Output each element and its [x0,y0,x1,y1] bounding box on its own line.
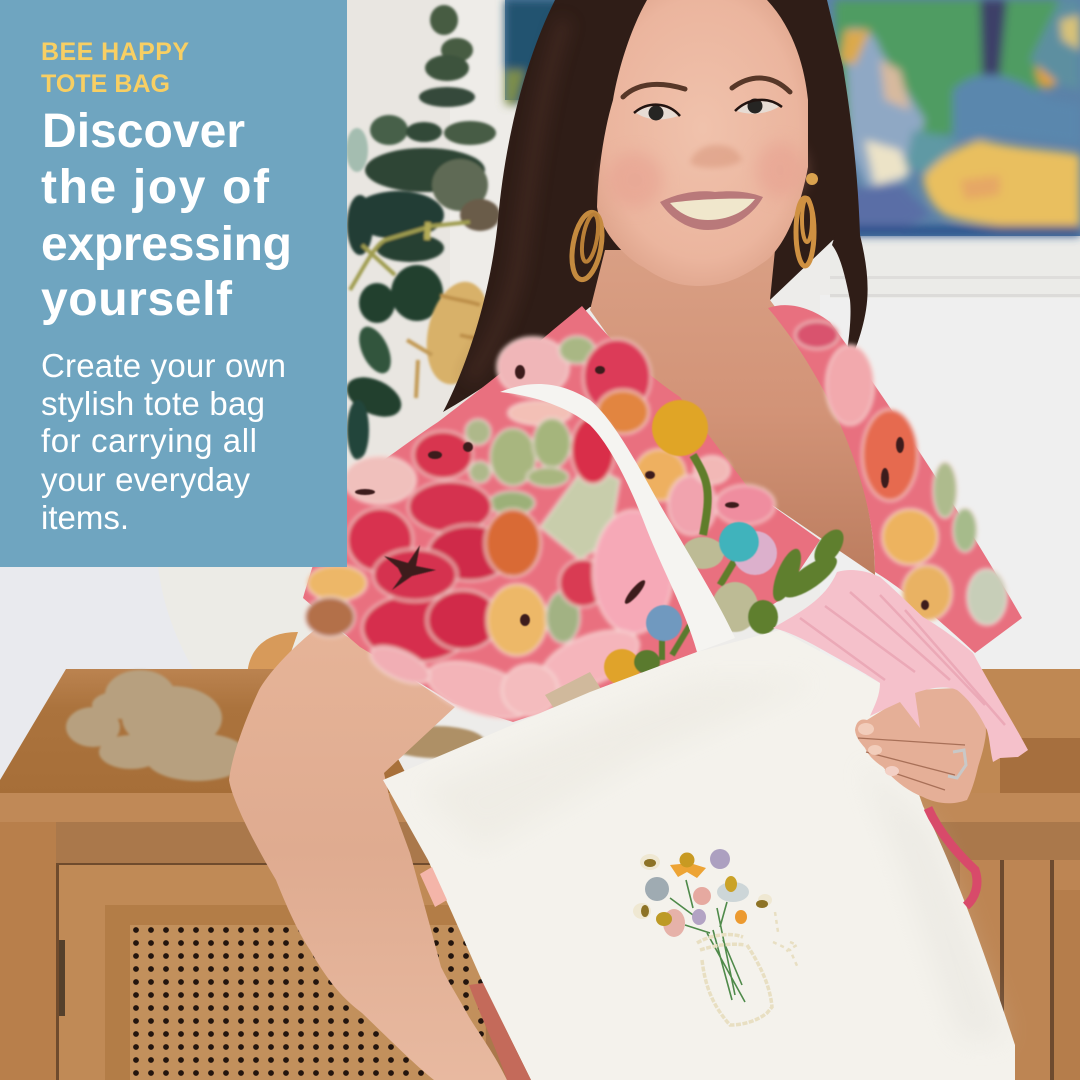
kicker text: BEE HAPPY [41,38,189,66]
woman: back hair [443,0,860,412]
pink daisy [656,909,685,937]
jute place mat [66,670,485,781]
tote bag strap [500,384,735,652]
tote bag label [420,867,447,907]
main heading: the joy of [41,161,270,214]
panel background [0,0,347,567]
felt flowers [604,400,849,685]
main heading: yourself [41,273,233,326]
body text: for carrying all [41,422,257,459]
body text: Create your own [41,347,286,384]
tissue wrapping [545,672,605,710]
pale daisy [717,876,749,902]
jar lid bow [697,935,745,950]
body text: your everyday [41,461,250,498]
pink scarf [773,570,1028,762]
lilac flower [692,909,706,925]
main heading: Discover [42,105,245,158]
main heading [41,105,292,326]
bee trail [773,912,798,968]
framed painting [450,0,1080,298]
plant with leaves [341,5,500,460]
eyes [634,98,782,120]
pink flower [693,887,711,905]
woman: neck and chest [590,250,875,575]
dried flower [407,276,498,398]
woman: arm [229,622,507,1080]
mouth [660,191,763,230]
tote bag body [383,630,1015,1080]
eyebrows [623,78,790,97]
hand with ring [855,688,986,803]
embroidery: flowers in jar [633,849,798,1025]
earrings [567,173,818,282]
terracotta pot [248,632,298,708]
sideboard [0,669,1080,1080]
vase [158,567,322,711]
grey flower [645,877,669,901]
tote bag folds [420,680,1005,1040]
hair strand [832,235,868,378]
body text: stylish tote bag [41,385,265,422]
woman: face [597,0,808,286]
woman: floral dress [303,305,1022,730]
nose [690,145,742,168]
stems [670,880,745,1002]
jar [702,945,772,1025]
purple flower [710,849,730,869]
kicker text: TOTE BAG [41,70,170,98]
body text: items. [41,499,129,536]
main heading: expressing [41,218,292,271]
orange bud [735,910,747,924]
bees [633,854,772,919]
dress hem below bag [469,983,531,1080]
yellow daisy [670,852,706,878]
bag lanyard [928,808,977,906]
body text [41,347,286,536]
hair highlights [470,20,565,380]
kicker text [41,38,189,98]
